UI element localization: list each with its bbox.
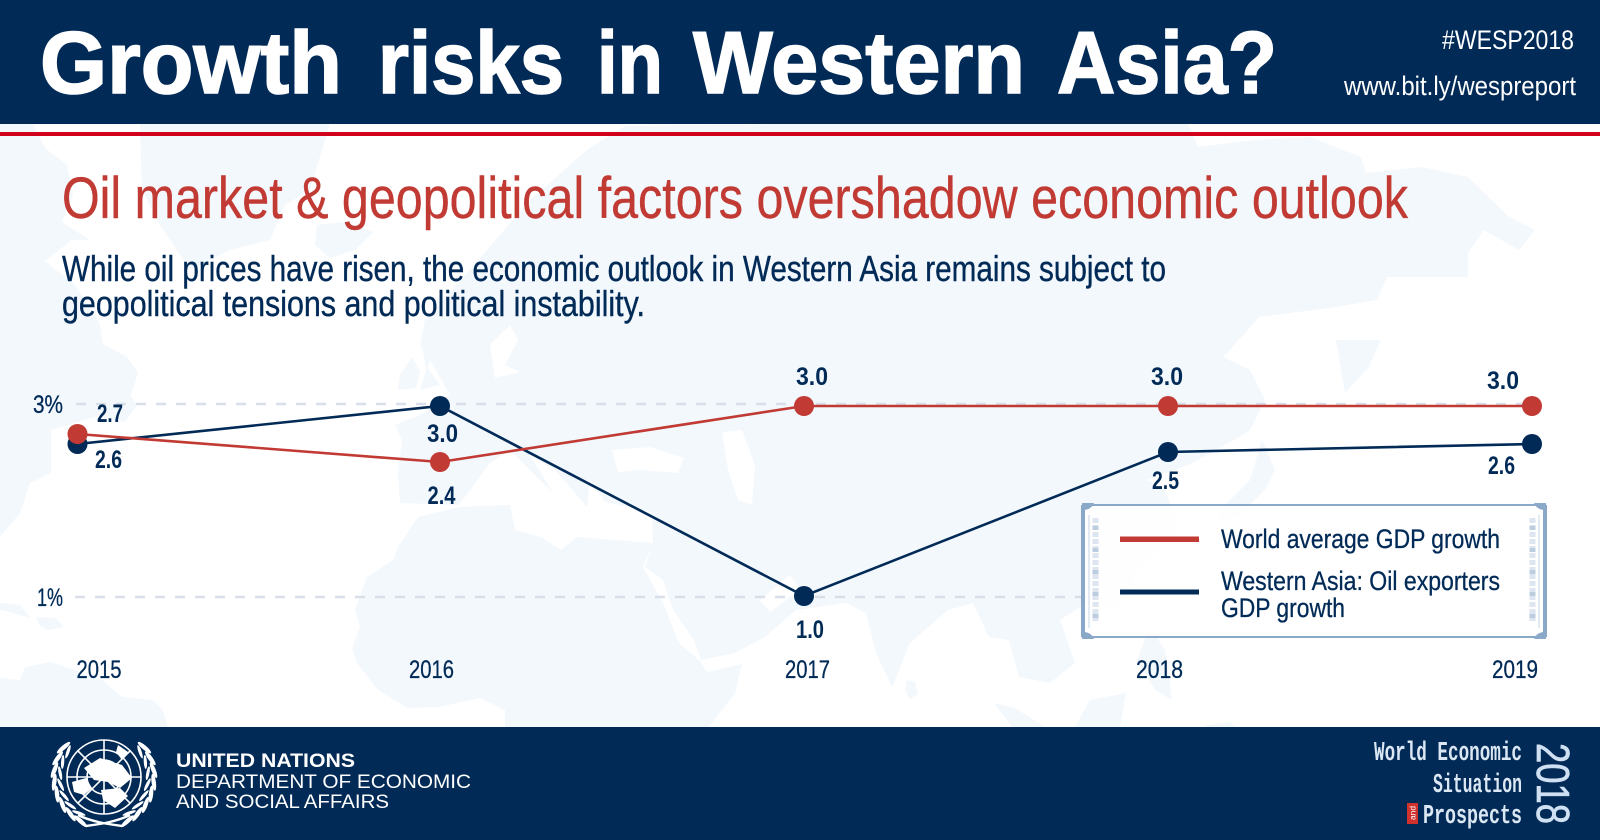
WESP report wordmark: Prospects (1423, 802, 1522, 832)
icon: red "and" tag (1407, 803, 1418, 824)
x axis labels: 2019 (1492, 656, 1538, 684)
title: in (597, 13, 663, 112)
intro text: While oil prices have risen, the economic outlook in Western Asia remains subject to (62, 248, 1166, 289)
line chart (33, 363, 1542, 684)
x axis labels: 2016 (409, 656, 454, 684)
legend key: Western Asia (1120, 590, 1199, 594)
icon: red "and" tag: and (1408, 806, 1418, 820)
data labels: 2.6 (1488, 452, 1515, 480)
legend label: Western Asia: Western Asia: Oil exporters (1221, 566, 1500, 596)
x axis labels: 2015 (76, 656, 122, 684)
x axis labels (76, 656, 1538, 684)
data labels: 2.4 (428, 482, 456, 510)
data labels: 2.7 (97, 400, 123, 428)
UN DESA wordmark: DEPARTMENT OF ECONOMIC (176, 772, 471, 793)
data labels: 3.0 (1151, 363, 1183, 391)
data labels: 2.6 (95, 446, 122, 474)
x axis labels: 2017 (785, 656, 830, 684)
data labels: 3.0 (427, 420, 458, 448)
UN DESA wordmark (176, 751, 471, 813)
intro text (62, 248, 1166, 324)
background world map (0, 124, 1535, 727)
report url: www.bit.ly/wespreport (1343, 71, 1576, 101)
data labels: 2.5 (1152, 467, 1179, 495)
legend key: world average (1120, 536, 1199, 542)
x axis labels: 2018 (1136, 656, 1183, 684)
footer band (0, 727, 1600, 840)
legend label: Western Asia: GDP growth (1221, 593, 1345, 623)
data labels: 3.0 (1487, 367, 1519, 395)
legend label: world average: World average GDP growth (1221, 524, 1500, 554)
legend label: Western Asia (1221, 566, 1500, 623)
series: Western Asia oil exporters (68, 396, 1542, 606)
y axis labels: 3% (33, 391, 63, 419)
series: world average (68, 396, 1542, 472)
y axis labels (33, 391, 63, 612)
UN DESA wordmark: AND SOCIAL AFFAIRS (176, 792, 389, 813)
hashtag: #WESP2018 (1442, 25, 1574, 55)
title: Western (693, 13, 1025, 112)
WESP report wordmark (1374, 739, 1522, 832)
WESP report wordmark: World Economic (1374, 739, 1522, 769)
UN DESA wordmark: UNITED NATIONS (176, 751, 355, 772)
WESP report wordmark: Situation (1433, 771, 1522, 801)
map: inland seas (490, 325, 800, 612)
header band (0, 0, 1600, 124)
title: Growth (40, 13, 342, 112)
data labels: 3.0 (796, 363, 828, 391)
intro text: geopolitical tensions and political instability. (62, 283, 645, 324)
icon: UN emblem (49, 740, 159, 828)
data labels: 1.0 (796, 616, 824, 644)
title: risks (378, 13, 564, 112)
title: Asia? (1057, 13, 1277, 112)
legend (1082, 503, 1546, 639)
data labels (95, 363, 1519, 644)
red rule (0, 132, 1600, 136)
y axis labels: 1% (37, 584, 63, 612)
